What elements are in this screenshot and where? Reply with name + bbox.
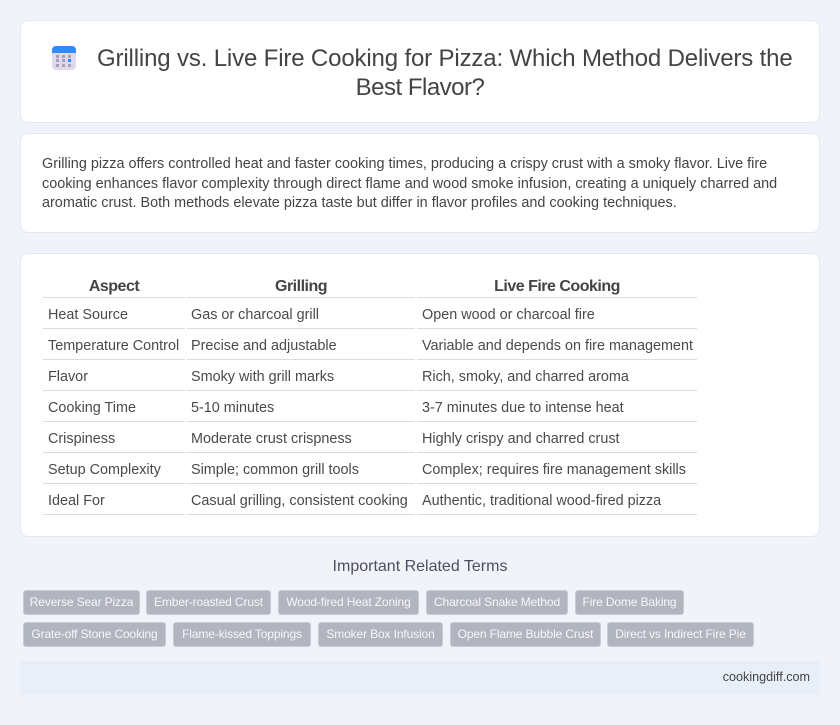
- footer: [20, 661, 820, 695]
- comparison table: Casual grilling, consistent cooking: [191, 493, 408, 509]
- related term tags: Ember-roasted Crust: [154, 595, 263, 609]
- comparison table: Rich, smoky, and charred aroma: [422, 369, 629, 385]
- footer source: cookingdiff.com: [723, 670, 810, 684]
- comparison table: Ideal For: [48, 493, 105, 509]
- related term tags: Grate-off Stone Cooking: [31, 627, 158, 641]
- intro text: cooking enhances flavor complexity through direct flame and wood smoke infusion, creating a uniquely charred and: [42, 176, 777, 192]
- title: Best Flavor?: [356, 74, 484, 101]
- title: [97, 45, 793, 101]
- comparison table: Smoky with grill marks: [191, 369, 334, 385]
- panel: comparison table: [20, 253, 820, 537]
- title: Grilling vs. Live Fire Cooking for Pizza: Which Method Delivers the: [97, 45, 793, 72]
- related term tags: [23, 590, 754, 647]
- comparison table: 3-7 minutes due to intense heat: [422, 400, 624, 416]
- panel: introduction: [20, 133, 820, 233]
- comparison table: Heat Source: [48, 307, 128, 323]
- comparison table: Authentic, traditional wood-fired pizza: [422, 493, 661, 509]
- heading: related terms: Important Related Terms: [333, 558, 507, 575]
- intro text: [42, 156, 777, 211]
- related term tags: Open Flame Bubble Crust: [458, 627, 593, 641]
- comparison table: Complex; requires fire management skills: [422, 462, 686, 478]
- related term tags: Flame-kissed Toppings: [182, 627, 302, 641]
- intro text: Grilling pizza offers controlled heat and faster cooking times, producing a crispy crust with a smoky flavor. Live fire: [42, 156, 767, 172]
- comparison table: Temperature Control: [48, 338, 179, 354]
- comparison table: Open wood or charcoal fire: [422, 307, 595, 323]
- comparison table: Live Fire Cooking: [494, 278, 620, 295]
- comparison table: Flavor: [48, 369, 88, 385]
- comparison table: 5-10 minutes: [191, 400, 274, 416]
- related term tags: Fire Dome Baking: [583, 595, 676, 609]
- intro text: aromatic crust. Both methods elevate pizza taste but differ in flavor profiles and cooking techniques.: [42, 195, 677, 211]
- icon: calendar: [52, 46, 76, 70]
- related term tags: Reverse Sear Pizza: [30, 595, 133, 609]
- comparison table: Simple; common grill tools: [191, 462, 359, 478]
- comparison table: [43, 278, 697, 515]
- comparison table: Precise and adjustable: [191, 338, 337, 354]
- comparison table: Setup Complexity: [48, 462, 161, 478]
- comparison table: Aspect: [89, 278, 139, 295]
- related term tags: Charcoal Snake Method: [434, 595, 560, 609]
- comparison table: Cooking Time: [48, 400, 136, 416]
- panel: header: [20, 20, 820, 123]
- comparison table: Variable and depends on fire management: [422, 338, 693, 354]
- comparison table: Crispiness: [48, 431, 115, 447]
- comparison table: Highly crispy and charred crust: [422, 431, 620, 447]
- related term tags: Wood-fired Heat Zoning: [286, 595, 411, 609]
- related term tags: Direct vs Indirect Fire Pie: [615, 627, 746, 641]
- comparison table: Gas or charcoal grill: [191, 307, 319, 323]
- comparison table: Grilling: [275, 278, 327, 295]
- related term tags: Smoker Box Infusion: [326, 627, 435, 641]
- comparison table: Moderate crust crispness: [191, 431, 352, 447]
